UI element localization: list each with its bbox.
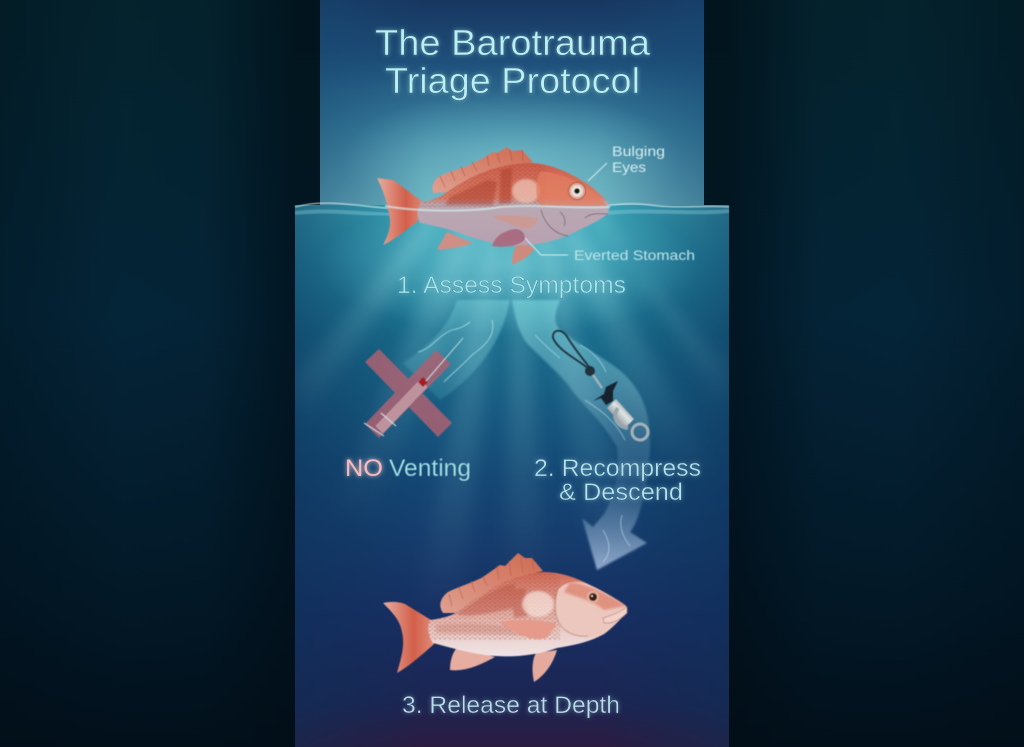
body (417, 163, 609, 245)
fish: barotrauma-affected fish at surface (377, 147, 610, 265)
step 3 label: 3. Release at Depth (402, 692, 620, 719)
gill line (555, 590, 588, 636)
dorsal fin (433, 147, 533, 193)
hooks (632, 424, 648, 440)
tail fin (383, 602, 434, 673)
pectoral fin (500, 620, 556, 639)
mouth (603, 607, 627, 623)
warning label: no venting (345, 455, 471, 482)
panel: underwater column (295, 195, 729, 747)
water surface line (295, 203, 729, 215)
ventral fin (437, 232, 473, 250)
head (555, 582, 627, 637)
rear ventral fin (450, 647, 495, 670)
step 2 label: & Descend (559, 479, 683, 506)
title (375, 22, 651, 101)
step 2 label: 2. Recompress (534, 455, 701, 482)
callout: bulging eyes: Bulging (612, 143, 665, 159)
crossbar (593, 381, 618, 405)
bead (585, 366, 595, 376)
clip body (607, 399, 634, 428)
lanyard loop (553, 331, 590, 369)
bulging eye (568, 182, 586, 200)
arrow: current to no venting (403, 300, 510, 400)
icon: crossed-out syringe (364, 338, 463, 438)
syringe (364, 338, 463, 436)
warning label: no venting: Venting (389, 455, 471, 482)
dorsal fin (440, 553, 543, 613)
fish: recovered fish at depth (383, 553, 627, 682)
warning label: no venting: NO (345, 455, 383, 482)
eye (587, 591, 599, 603)
icon: descending device (553, 331, 648, 440)
step 2 label (534, 455, 701, 506)
step 1 label: 1. Assess Symptoms (397, 272, 626, 299)
title: The Barotrauma (375, 22, 651, 63)
tail fin (377, 178, 425, 245)
lower fin (512, 243, 535, 265)
callout: bulging eyes (588, 143, 665, 181)
callout: everted stomach: Everted Stomach (574, 247, 695, 263)
body (428, 572, 627, 656)
callout: bulging eyes: Eyes (612, 159, 646, 175)
everted stomach (492, 229, 525, 247)
arrow: current to recompress and descend (512, 300, 650, 570)
callout: everted stomach (525, 238, 695, 263)
water overlay across fish (385, 206, 610, 211)
scale band markings (425, 570, 562, 640)
red cross (365, 349, 452, 438)
pectoral fin (492, 215, 539, 229)
front ventral fin (533, 650, 557, 682)
jaw and gill lines (541, 210, 608, 236)
pale flank patch (522, 591, 554, 617)
pale flank patch (512, 179, 540, 203)
scale markings (418, 166, 543, 208)
panel: sky above the surface (320, 0, 704, 230)
title: Triage Protocol (385, 60, 640, 101)
gill cover (536, 172, 607, 206)
